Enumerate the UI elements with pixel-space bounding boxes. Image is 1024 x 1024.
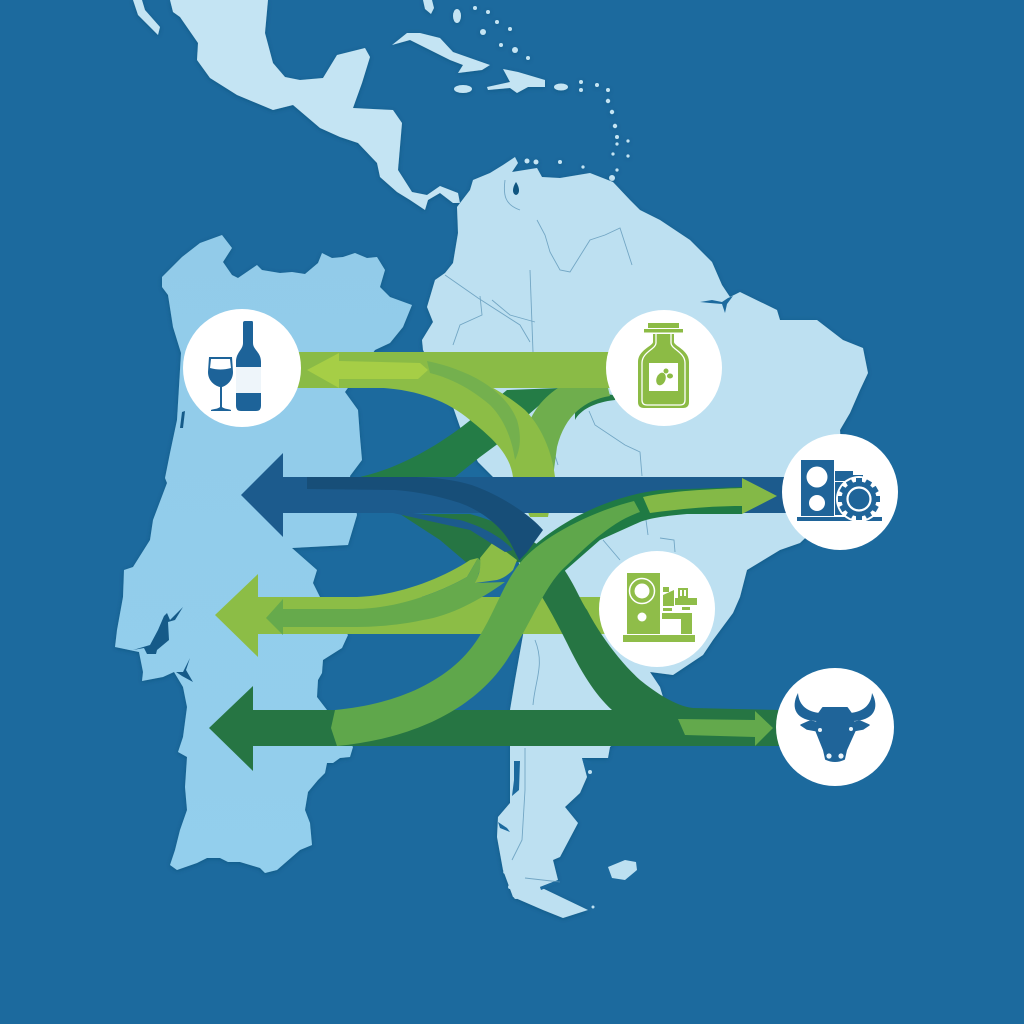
light green patch at curve crossing (475, 542, 517, 583)
head (816, 708, 855, 761)
icon: olive jar (606, 310, 722, 426)
table and small parts (662, 587, 697, 634)
icon: processing machine (599, 551, 715, 667)
jar label (649, 363, 678, 391)
horns (795, 693, 875, 721)
Baja California (133, 0, 160, 35)
machine base (623, 635, 695, 642)
icon: wine bottle and glass (183, 309, 301, 427)
machine dial (630, 578, 654, 604)
Patagonian channels and straits (498, 758, 592, 890)
jar inner outline (642, 334, 685, 405)
Hispaniola (487, 69, 545, 93)
Amazon mouth (700, 296, 733, 313)
flow arrows (209, 352, 790, 771)
Florida tip and Caribbean islands (423, 0, 630, 181)
Tagus and Sado estuaries (133, 607, 183, 654)
bottle (236, 321, 261, 411)
factory block (801, 460, 834, 516)
machine housing (835, 471, 863, 481)
dark green curved flow behind top band (360, 388, 560, 477)
Iberia landmass (115, 235, 412, 873)
medium green curved flow to jar (575, 394, 616, 420)
olive flow band (296, 352, 610, 388)
Lake Maracaibo (513, 182, 519, 195)
gear (836, 476, 882, 522)
South America landmass (422, 157, 868, 918)
light green band in lower curve (283, 558, 478, 609)
olives (655, 368, 673, 387)
Falkland Islands (608, 860, 637, 880)
small window marks (680, 590, 686, 596)
crescent highlight on curved flow (427, 361, 520, 460)
icon: factory and gear (782, 434, 898, 550)
light green curved flow (340, 361, 555, 517)
jar body (638, 323, 689, 408)
dark green outline of S curve (518, 487, 742, 575)
blue arrow (241, 453, 790, 537)
wine glass (208, 357, 233, 411)
dark green arrow with curve to bull (209, 514, 780, 771)
green inner arrow (266, 558, 505, 635)
country borders (445, 180, 675, 882)
dark blue overlay curve (307, 477, 543, 562)
bottle label (236, 367, 261, 393)
map: South America (422, 157, 868, 918)
ears (801, 721, 869, 731)
Aveiro lagoon mark (180, 411, 185, 428)
Cuba (392, 33, 490, 73)
light green arrow row (215, 574, 606, 657)
factory windows (806, 466, 828, 488)
inner arrow to wine icon (307, 353, 428, 388)
arrow to bull icon (678, 711, 773, 746)
map: Iberian Peninsula (115, 235, 412, 873)
eyes and nostrils (818, 727, 853, 759)
dark blue lower curve (393, 510, 513, 552)
map: Central America and Caribbean (133, 0, 630, 210)
icon: bull head (776, 668, 894, 786)
medium green S curve (331, 501, 640, 746)
base plate (797, 517, 882, 521)
Mexico and Central America (170, 0, 460, 210)
machine body (627, 573, 660, 634)
Tierra del Fuego islets (502, 770, 594, 908)
arrow to gear icon (643, 478, 777, 514)
